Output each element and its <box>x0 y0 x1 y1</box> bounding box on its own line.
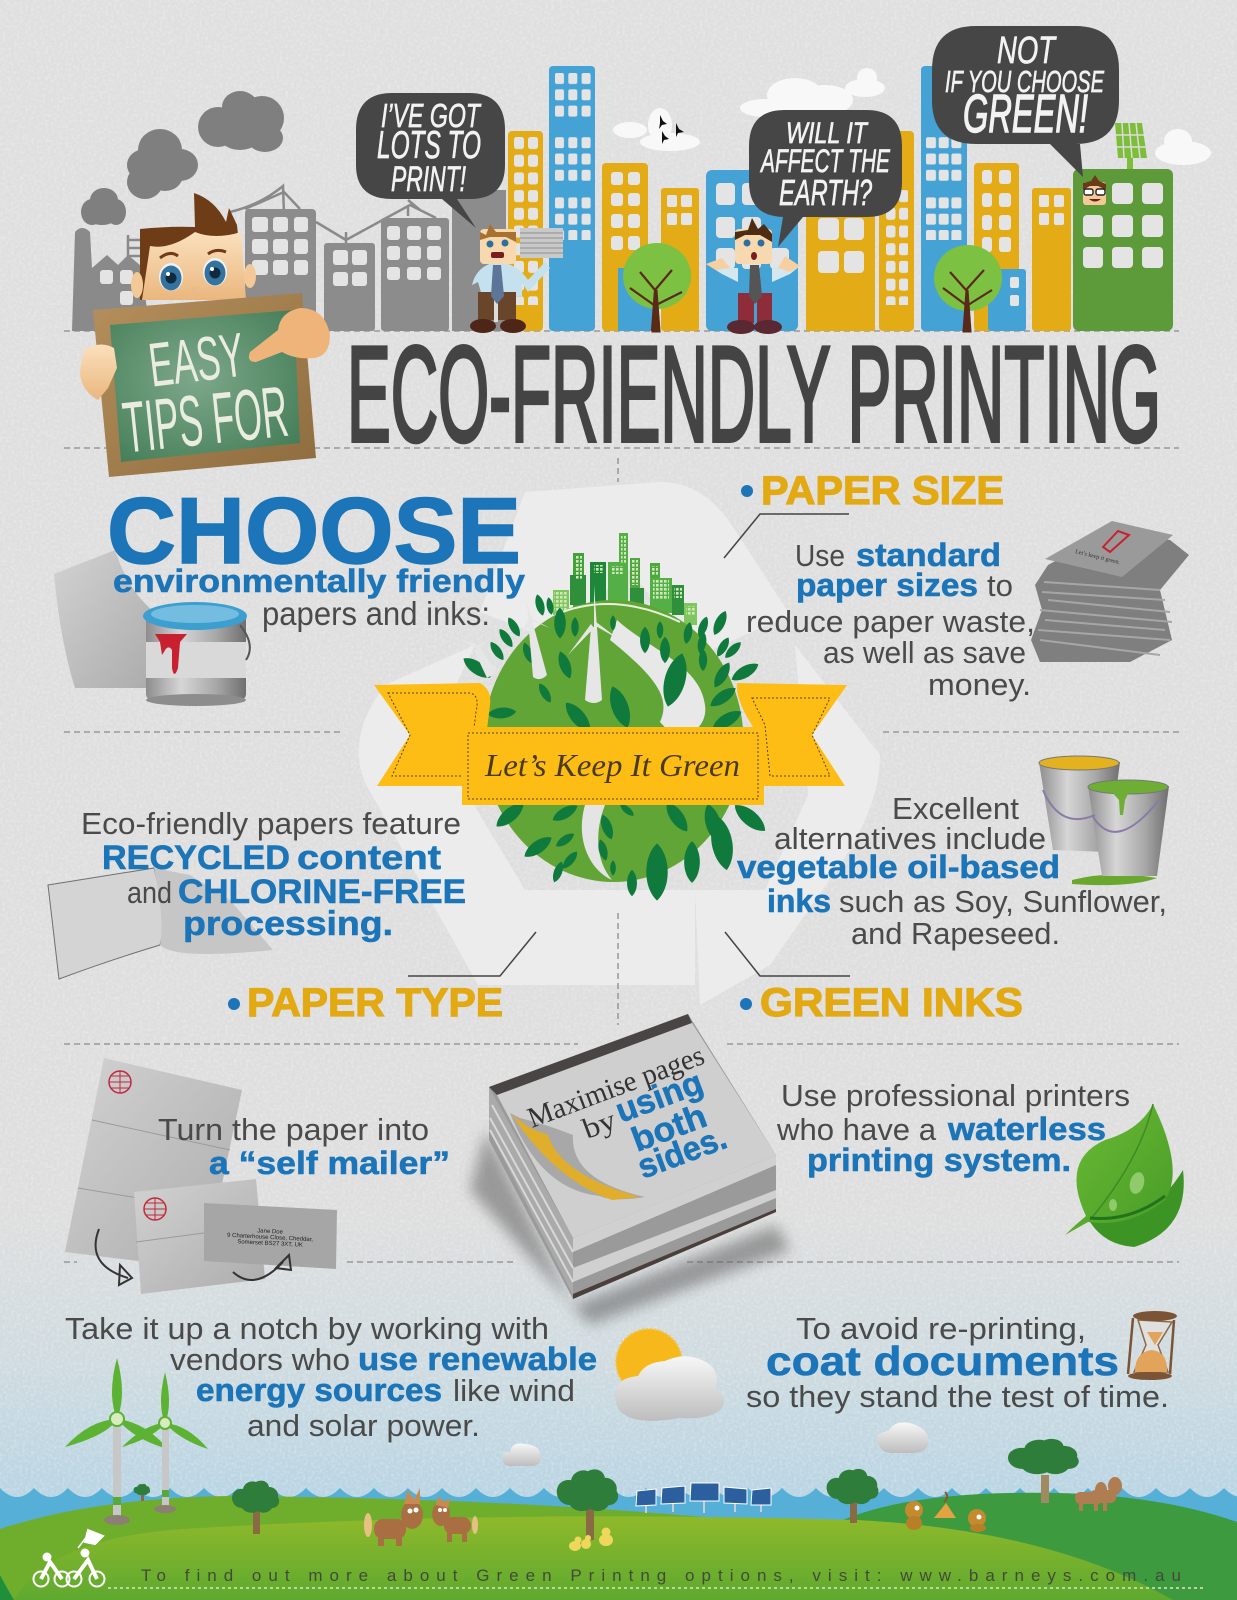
section: paper size: standard <box>856 537 1001 573</box>
section: paper type: Eco-friendly papers feature <box>81 806 461 841</box>
small clouds <box>502 1422 928 1466</box>
water waves <box>0 1488 1237 1600</box>
wind turbines on hills <box>65 1358 208 1525</box>
text: waterless printing <box>776 1078 1130 1178</box>
green city on globe <box>553 533 697 625</box>
horses <box>364 1488 478 1546</box>
chalkboard: easy tips for: TIPS FOR <box>119 372 292 469</box>
heading: choose <box>107 478 525 632</box>
text: coat documents: so they stand the test of time. <box>746 1379 1169 1414</box>
ducklings <box>569 1528 613 1551</box>
text: waterless printing: Use professional printers <box>781 1078 1130 1113</box>
text: waterless printing: waterless <box>947 1111 1106 1147</box>
text: renewable energy: use renewable <box>358 1341 597 1377</box>
solar panels <box>636 1483 771 1513</box>
icon: paper sheet <box>54 550 152 688</box>
illustration: self mailer sheets: 9 Charterhouse Close, Cheddar, <box>227 1233 314 1243</box>
hands on the chalkboard <box>80 308 330 400</box>
leaves ring <box>460 593 770 901</box>
speech bubble: not if you choose green: NOT <box>997 30 1057 72</box>
speech bubble: will it affect the earth <box>749 110 902 247</box>
grey buildings <box>245 190 506 331</box>
trees on hills <box>134 1439 1079 1540</box>
front hill <box>14 1516 1173 1600</box>
section: paper size <box>724 469 1035 702</box>
section: green inks <box>725 791 1167 1025</box>
footer url: To find out more about Green Printng options, visit: www.barneys.com.au <box>141 1566 1181 1585</box>
character: man holding paper <box>470 224 563 333</box>
section: green inks: and Rapeseed. <box>851 916 1060 951</box>
illustration: notepad using both sides <box>470 1014 790 1325</box>
section: paper size: to <box>987 568 1013 603</box>
ribbon banner: let's keep it green <box>374 683 847 805</box>
factory <box>72 228 150 331</box>
speech bubble: will it affect the earth: WILL IT <box>786 117 869 150</box>
section: paper size: paper sizes <box>796 567 978 603</box>
section: green inks: such as Soy, Sunflower, <box>839 884 1167 919</box>
text: renewable energy: like wind <box>453 1373 575 1408</box>
back hills <box>0 1496 840 1600</box>
illustration: notepad using both sides: using <box>610 1063 708 1130</box>
heading: choose: environmentally friendly <box>113 563 525 599</box>
text: renewable energy: and solar power. <box>247 1408 480 1443</box>
paper type text: PAPER TYPE <box>247 981 503 1025</box>
smoke clouds <box>81 91 284 225</box>
illustration: self mailer sheets: Jane Doe <box>257 1228 284 1236</box>
sky and hills landscape <box>0 1488 1237 1600</box>
text: renewable energy <box>65 1311 597 1443</box>
section: green inks: Excellent <box>892 791 1019 826</box>
paper type text <box>102 839 536 1025</box>
speech bubble: I've got lots to print: I’VE GOT <box>381 97 482 134</box>
section: paper size: PAPER SIZE <box>761 469 1004 513</box>
faint recycling symbol <box>359 482 880 1005</box>
dogs and cat <box>905 1492 986 1532</box>
illustration: notepad using both sides: sides. <box>632 1119 732 1186</box>
section: green inks: vegetable oil-based <box>737 849 1060 885</box>
icon: paint can <box>143 602 250 706</box>
sun and cloud <box>615 1329 724 1421</box>
speech bubble: I've got lots to print: LOTS TO <box>377 124 481 167</box>
section: green inks: inks <box>767 883 831 919</box>
large character peeking over chalkboard <box>131 193 256 300</box>
icon: ink buckets <box>1039 756 1169 885</box>
speech bubble: not if you choose green: GREEN! <box>963 84 1088 144</box>
text: renewable energy: energy sources <box>196 1372 442 1408</box>
chalkboard: easy tips for <box>93 293 316 477</box>
skyline: clean colourful city <box>508 66 1211 331</box>
speech bubble: not if you choose green <box>932 26 1119 177</box>
illustration: self mailer sheets: Somerset BS27 3XT, UK <box>237 1239 303 1249</box>
icon: open magazine <box>48 868 273 979</box>
speech bubble: will it affect the earth: AFFECT THE <box>760 143 890 179</box>
section: green inks: GREEN INKS <box>760 981 1023 1025</box>
text: waterless printing: printing system. <box>807 1142 1071 1178</box>
section: paper size: reduce paper waste, <box>746 604 1035 639</box>
illustration: notepad using both sides: by <box>578 1104 621 1146</box>
text: self mailer <box>158 1112 450 1181</box>
small horses <box>1075 1477 1122 1511</box>
paper type text: and <box>127 875 172 910</box>
trees <box>623 243 1002 331</box>
paper type text: CHLORINE-FREE <box>178 873 466 911</box>
text: coat documents <box>746 1311 1169 1414</box>
icon: stack of paper: Let’s keep it green. <box>1075 549 1121 566</box>
section dividers <box>64 331 1179 1262</box>
globe with city and turbines <box>460 533 770 901</box>
illustration: self mailer sheets <box>65 1058 337 1294</box>
speech bubble: I've got lots to print: PRINT! <box>391 160 466 199</box>
icon: green leaf <box>1065 1104 1184 1247</box>
birds <box>659 115 684 144</box>
ribbon banner: let's keep it green: Let’s Keep It Green <box>484 747 740 783</box>
paper type text: content <box>297 839 441 877</box>
character head with glasses in window <box>1083 175 1106 205</box>
illustration: notepad using both sides: Maximise pages <box>523 1039 709 1135</box>
text: self mailer: a “self mailer” <box>209 1145 450 1181</box>
icon: cyclists with flag <box>34 1530 104 1586</box>
heading: choose: CHOOSE <box>107 478 521 583</box>
section: paper size: money. <box>928 667 1031 702</box>
speech bubble: will it affect the earth: EARTH? <box>779 172 872 213</box>
section: green inks: alternatives include <box>774 821 1046 856</box>
speech bubble: not if you choose green: IF YOU CHOOSE <box>945 64 1104 99</box>
chalkboard: easy tips for: EASY <box>145 321 248 401</box>
section: paper size: as well as save <box>823 635 1026 670</box>
white road <box>610 620 705 736</box>
text: renewable energy: vendors who <box>170 1342 350 1377</box>
paper type text: processing. <box>183 905 393 943</box>
character: worried man shrugging <box>706 218 800 334</box>
text: renewable energy: Take it up a notch by working with <box>65 1311 549 1346</box>
section: paper size: Use <box>795 538 845 573</box>
white clouds <box>613 68 1211 165</box>
illustration: notepad using both sides: both <box>626 1097 712 1159</box>
wind turbines <box>462 585 620 703</box>
icon: hourglass <box>1128 1311 1177 1380</box>
icon: stack of paper <box>1031 521 1189 662</box>
text: coat documents: To avoid re-printing, <box>796 1311 1086 1346</box>
text: coat documents: coat documents <box>766 1338 1119 1384</box>
text: self mailer: Turn the paper into <box>158 1112 429 1147</box>
speech bubble: I've got lots to print <box>356 93 505 228</box>
paper type text: RECYCLED <box>102 839 290 877</box>
green building with solar panel <box>1073 123 1173 331</box>
text: waterless printing: who have a <box>776 1112 937 1147</box>
heading: choose: papers and inks: <box>262 595 490 632</box>
skyline: polluted grey city <box>72 91 506 331</box>
